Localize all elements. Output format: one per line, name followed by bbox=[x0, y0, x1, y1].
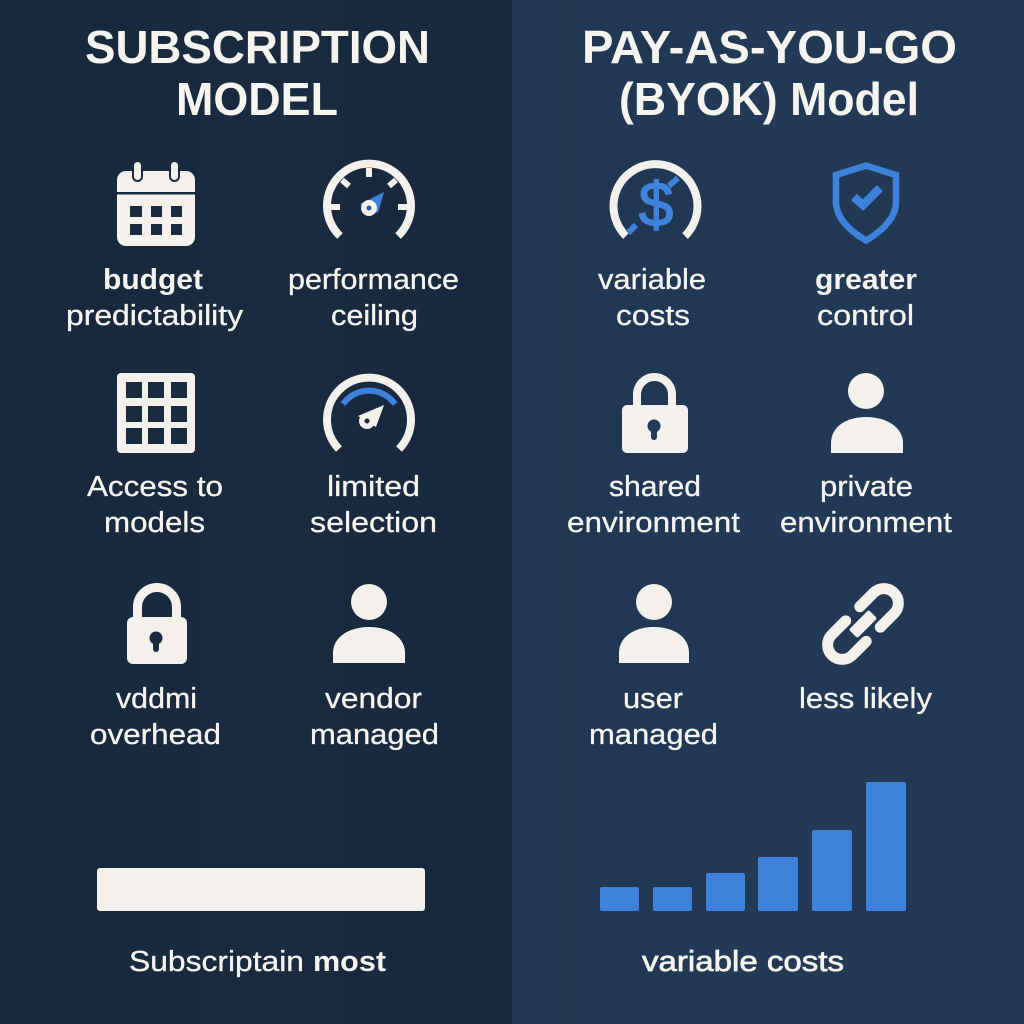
heading: pay-as-you-go byok model: (BYOK) Model bbox=[619, 73, 919, 125]
panel: pay-as-you-go model bbox=[512, 0, 1024, 1024]
icon: person bbox=[831, 373, 903, 453]
label: variable costs: variable bbox=[598, 264, 706, 296]
label: budget predictability: predictability bbox=[66, 300, 244, 332]
item: budget predictability bbox=[66, 161, 244, 332]
icon: padlock bbox=[127, 588, 187, 664]
label: vendor managed: managed bbox=[310, 719, 439, 751]
label: vendor managed: vendor bbox=[325, 683, 422, 715]
label: budget predictability: budget bbox=[103, 264, 203, 296]
icon: padlock bbox=[622, 377, 688, 453]
item: user managed bbox=[589, 584, 718, 751]
item: less likely bbox=[799, 583, 933, 715]
icon: calendar bbox=[117, 161, 195, 246]
heading: subscription model bbox=[85, 21, 430, 125]
heading: pay-as-you-go byok model bbox=[582, 21, 957, 125]
label: shared environment: environment bbox=[567, 507, 740, 539]
icon: shield with check bbox=[836, 166, 896, 240]
label: private environment bbox=[780, 471, 952, 539]
heading: subscription model: SUBSCRIPTION bbox=[85, 21, 430, 73]
label: access to models: Access to bbox=[87, 471, 223, 503]
item: shared environment bbox=[567, 377, 740, 539]
label: less likely: less likely bbox=[799, 683, 933, 715]
label: user managed: managed bbox=[589, 719, 718, 751]
icon: grid bbox=[117, 373, 195, 453]
label: vddmi overhead: vddmi bbox=[116, 683, 197, 715]
item: variable costs bbox=[598, 164, 706, 332]
label: greater control: control bbox=[817, 300, 914, 332]
label: vddmi overhead bbox=[90, 683, 221, 751]
label: limited selection: limited bbox=[327, 471, 420, 503]
label: performance ceiling bbox=[288, 264, 459, 332]
item: vendor managed bbox=[310, 584, 439, 751]
item: greater control bbox=[815, 166, 917, 332]
caption: subscriptain most: Subscriptain bbox=[129, 946, 304, 978]
label: budget predictability bbox=[66, 264, 244, 332]
label: access to models: models bbox=[104, 507, 205, 539]
bar chart: rising variable costs bbox=[600, 782, 906, 911]
icon: chain link bbox=[822, 583, 904, 665]
label: limited selection bbox=[310, 471, 437, 539]
item: admin overhead bbox=[90, 588, 221, 751]
label: performance ceiling: ceiling bbox=[331, 300, 418, 332]
item: performance ceiling bbox=[288, 164, 459, 332]
label: shared environment: shared bbox=[609, 471, 701, 503]
label: variable costs: costs bbox=[616, 300, 690, 332]
label: shared environment bbox=[567, 471, 740, 539]
label: limited selection: selection bbox=[310, 507, 437, 539]
flat cost bar bbox=[97, 868, 425, 911]
caption: variable costs: variable costs bbox=[642, 946, 844, 978]
label: user managed bbox=[589, 683, 718, 751]
panel: subscription model bbox=[0, 0, 512, 1024]
item: access to models bbox=[87, 373, 223, 539]
label: private environment: private bbox=[820, 471, 913, 503]
icon: dollar gauge: $ bbox=[639, 171, 673, 240]
heading: subscription model: MODEL bbox=[176, 73, 338, 125]
label: greater control: greater bbox=[815, 264, 917, 296]
label: performance ceiling: performance bbox=[288, 264, 459, 296]
label: access to models bbox=[87, 471, 223, 539]
label: greater control bbox=[815, 264, 917, 332]
icon: person bbox=[333, 584, 405, 663]
icon: gauge with blue arc bbox=[327, 378, 411, 449]
icon: dollar gauge bbox=[614, 164, 698, 240]
label: variable costs bbox=[598, 264, 706, 332]
caption: subscriptain most: most bbox=[313, 946, 386, 978]
label: vddmi overhead: overhead bbox=[90, 719, 221, 751]
item: private environment bbox=[780, 373, 952, 539]
heading: pay-as-you-go byok model: PAY-AS-YOU-GO bbox=[582, 21, 957, 73]
item: limited selection bbox=[310, 378, 437, 539]
label: private environment: environment bbox=[780, 507, 952, 539]
icon: speedometer bbox=[327, 164, 411, 236]
label: user managed: user bbox=[623, 683, 683, 715]
icon: person bbox=[619, 584, 689, 663]
caption: subscriptain most bbox=[129, 946, 386, 978]
label: vendor managed bbox=[310, 683, 439, 751]
